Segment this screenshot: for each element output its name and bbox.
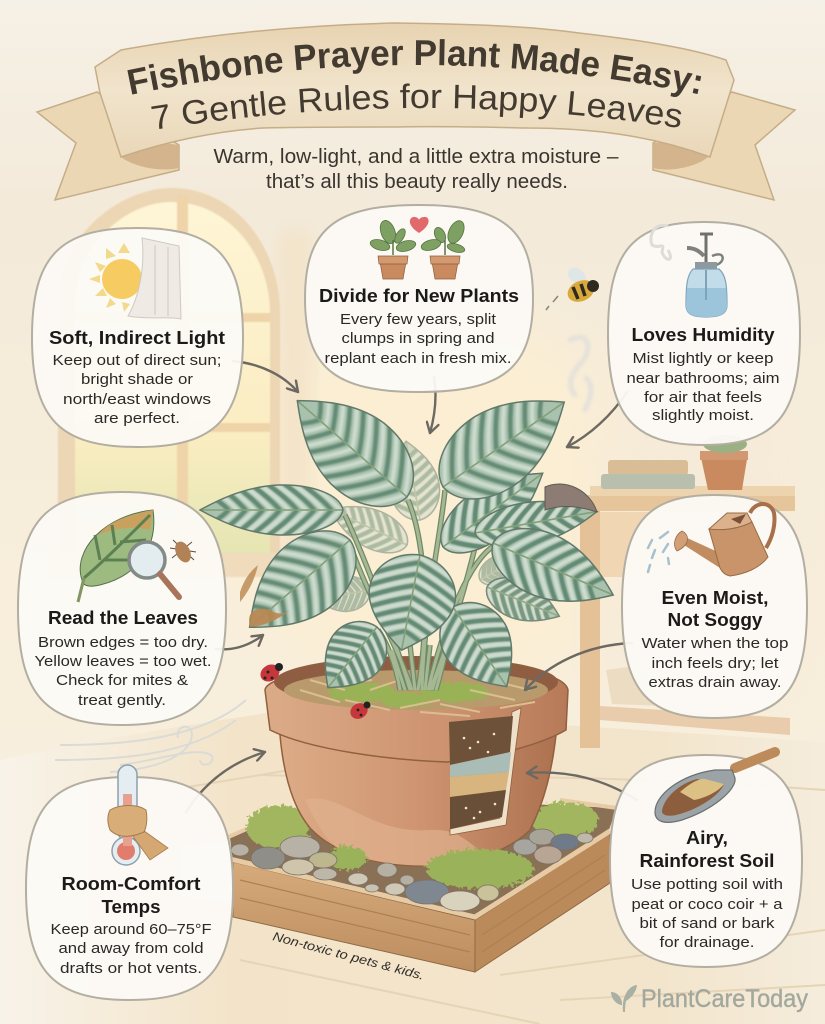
body text: drafts or hot vents. <box>60 961 202 977</box>
heading: Loves Humidity <box>632 324 775 345</box>
arrow: humidity to plant <box>567 392 627 447</box>
leaf brown tip <box>471 484 601 556</box>
arrow: soil to cutaway <box>527 772 637 800</box>
tray left wall <box>233 862 475 972</box>
pot body <box>280 735 556 866</box>
leaf top right <box>419 367 589 522</box>
body text: extras drain away. <box>648 675 782 691</box>
ribbon main band <box>95 23 734 157</box>
title line 2: 7 Gentle Rules for Happy Leaves <box>151 83 682 129</box>
body text <box>642 636 788 691</box>
body text <box>34 635 211 709</box>
body text: and away from cold <box>58 941 204 957</box>
body text: Use potting soil with <box>631 877 783 893</box>
moss back clumps <box>246 802 599 849</box>
arrow: divide to plant <box>430 377 435 433</box>
body text: Brown edges = too dry. <box>38 635 208 651</box>
body text <box>626 351 780 424</box>
faded back leaves <box>313 437 531 618</box>
title line 1: Fishbone Prayer Plant Made Easy: <box>127 39 702 97</box>
icon: watering can <box>648 504 775 576</box>
bee <box>546 264 599 310</box>
pot opening <box>274 656 558 708</box>
body text <box>631 877 783 951</box>
subtitle: that’s all this beauty really needs. <box>266 171 568 193</box>
ribbon left tail <box>37 92 179 200</box>
heading: Temps <box>102 896 160 917</box>
panel: Soft, Indirect Light <box>32 228 243 447</box>
heading: Airy, <box>686 827 728 848</box>
arrow: read leaves to leaf <box>216 635 263 649</box>
body text: Keep out of direct sun; <box>52 353 222 369</box>
wind streaks <box>55 700 246 772</box>
icon: leaf, magnifier and beetle <box>78 510 196 602</box>
faded right leaf <box>479 568 567 636</box>
ladybug on rim front <box>347 700 371 722</box>
moss in pot <box>328 682 489 708</box>
icon: sun and curtain <box>89 238 181 319</box>
heading <box>62 873 200 917</box>
leaf behind right <box>426 451 559 570</box>
window with arched frame <box>48 188 288 577</box>
heading: Rainforest Soil <box>640 850 774 871</box>
subtitle <box>214 146 619 193</box>
heading: Not Soggy <box>668 609 763 630</box>
logo: PlantCareToday: PlantCareToday <box>641 985 808 1013</box>
leaf mid left with brown edge <box>223 509 377 658</box>
body text: Yellow leaves = too wet. <box>34 654 211 670</box>
moss front clumps <box>327 846 534 889</box>
heading: Soft, Indirect Light <box>49 327 225 348</box>
panel: Room-Comfort Temps <box>26 765 233 1000</box>
wooden tray with pebbles and moss <box>226 795 617 972</box>
stems <box>345 490 495 690</box>
heading: Room-Comfort <box>62 873 200 894</box>
straw <box>300 680 535 716</box>
body text: inch feels dry; let <box>652 656 778 672</box>
body text: north/east windows <box>63 392 211 408</box>
icon: soil scoop <box>655 752 775 822</box>
ribbon right tail <box>653 92 795 200</box>
body text <box>324 312 512 367</box>
panel: Even Moist, Not Soggy <box>622 495 807 718</box>
body text: bright shade or <box>81 372 193 388</box>
terracotta pot <box>265 656 568 866</box>
tray interior <box>230 795 617 920</box>
mulch <box>284 670 548 710</box>
icon: thermometer with scarf <box>108 765 168 865</box>
body text: Mist lightly or keep <box>632 351 774 367</box>
steam swirls <box>570 337 591 410</box>
title ribbon <box>36 22 796 201</box>
body text: Keep around 60–75°F <box>50 922 212 938</box>
body text: for air that feels <box>644 390 762 406</box>
body text: clumps in spring and <box>342 331 494 347</box>
leaf bottom right <box>423 587 537 707</box>
pot rim <box>265 664 568 762</box>
arrow: water to soil <box>525 643 632 690</box>
icon: two pots and heart <box>369 217 467 279</box>
panel: Divide for New Plants <box>305 205 533 392</box>
plant <box>200 367 627 707</box>
body text: Check for mites & <box>56 673 188 689</box>
body text: are perfect. <box>94 411 180 427</box>
body text: treat gently. <box>78 693 166 709</box>
heading: Read the Leaves <box>48 607 198 628</box>
leaf center <box>356 546 466 659</box>
body text: for drainage. <box>660 935 754 951</box>
body text: Water when the top <box>642 636 788 652</box>
body text: slightly moist. <box>652 408 754 424</box>
ladybug on rim left <box>257 661 283 685</box>
body text: peat or coco coir + a <box>632 897 783 913</box>
body text: near bathrooms; aim <box>626 371 780 387</box>
panel: Airy, Rainforest Soil <box>610 752 802 967</box>
arrow: light to plant <box>233 361 298 392</box>
heading <box>640 827 774 871</box>
arrow: temps to pot <box>186 752 265 812</box>
leaf bottom left <box>304 607 401 707</box>
leaf top left <box>268 368 436 530</box>
soil cutaway <box>449 708 521 835</box>
subtitle: Warm, low-light, and a little extra moisture – <box>214 146 619 168</box>
panel: Read the Leaves <box>18 492 226 725</box>
panel: Loves Humidity <box>608 222 800 445</box>
body text: replant each in fresh mix. <box>324 351 512 367</box>
heading <box>662 587 768 630</box>
body text <box>50 922 212 977</box>
ribbon right fold <box>653 140 708 170</box>
heading: Even Moist, <box>662 587 768 608</box>
heading: Divide for New Plants <box>319 285 519 306</box>
leaf right <box>479 512 627 627</box>
ribbon left fold <box>121 140 179 170</box>
floor boards <box>0 708 825 1024</box>
icon: mist spray bottle <box>651 225 727 317</box>
side table with books, pot and basket <box>580 435 795 748</box>
note: non-toxic: Non-toxic to pets & kids. <box>271 929 426 983</box>
leaf left horizontal <box>200 483 343 537</box>
pebbles <box>231 829 593 911</box>
body text: bit of sand or bark <box>640 916 775 932</box>
body text <box>52 353 222 427</box>
arrows <box>186 361 637 812</box>
icon: logo leaf <box>611 985 637 1012</box>
tray right wall <box>475 833 610 972</box>
body text: Every few years, split <box>340 312 496 328</box>
